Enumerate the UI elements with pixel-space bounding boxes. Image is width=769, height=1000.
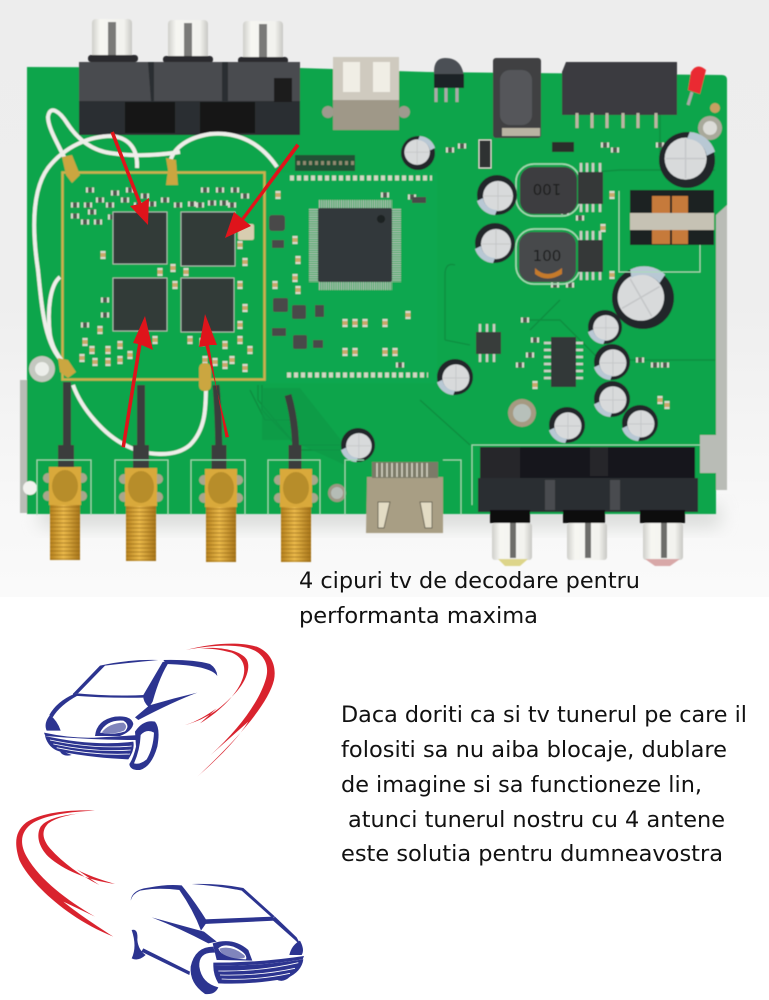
arrow: bottom-right chip <box>199 314 229 438</box>
small sub-board parts <box>269 197 426 349</box>
icon: upper fast car <box>44 644 275 777</box>
gold u.fl connectors <box>58 155 211 391</box>
logic chips <box>476 140 583 387</box>
USB port <box>322 57 410 130</box>
icon: lower fast car <box>16 810 304 994</box>
text block: tuner benefits: Daca doriti ca si tv tunerul pe care il <box>341 703 747 728</box>
connector pins row <box>295 155 355 171</box>
inductor value 100 <box>533 180 561 265</box>
mounting holes <box>23 103 722 502</box>
edge pad rows <box>287 178 432 375</box>
metal plate behind board <box>20 205 727 513</box>
electrolytic capacitors <box>341 132 715 462</box>
inductor value 100: 100 <box>533 247 561 265</box>
power jack <box>493 58 541 138</box>
HDMI port <box>366 462 443 533</box>
LED <box>688 66 706 105</box>
pin header <box>562 62 677 128</box>
common-mode choke <box>619 190 714 272</box>
power inductors <box>516 164 580 284</box>
tuner module <box>62 172 266 380</box>
caption: decoding chips: 4 cipuri tv de decodare pentru <box>299 569 640 594</box>
ground plane shading <box>262 388 345 465</box>
antenna cables <box>66 382 296 470</box>
arrow: top-right chip <box>225 144 300 238</box>
power ICs <box>578 163 603 280</box>
four tuner chips <box>113 212 235 332</box>
solder pads <box>71 142 670 409</box>
SMA antenna connectors <box>43 467 318 562</box>
sub-board <box>265 173 437 383</box>
text block: tuner benefits: folositi sa nu aiba blocaje, dublare <box>341 738 727 763</box>
inductor value 100: 100 <box>533 180 561 198</box>
crystal <box>238 224 254 240</box>
blue car body <box>131 884 304 994</box>
copper traces <box>250 110 715 450</box>
bottom RCA jacks <box>478 447 698 566</box>
RCA jacks top <box>79 19 300 135</box>
white silk boxes <box>37 445 700 515</box>
blue car body <box>44 660 217 770</box>
text block: tuner benefits: atunci tunerul nostru cu 4 antene <box>348 808 725 833</box>
arrow: top-left chip <box>110 131 149 225</box>
caption: decoding chips <box>299 569 640 629</box>
main processor <box>309 200 401 290</box>
red arrows pointing to chips <box>110 131 300 448</box>
grille lines <box>218 963 298 979</box>
red speed trails <box>185 644 275 777</box>
green PCB <box>27 67 727 514</box>
IR receiver <box>434 58 464 102</box>
caption: decoding chips: performanta maxima <box>299 604 538 629</box>
red speed trails <box>16 810 115 937</box>
text block: tuner benefits: de imagine si sa functioneze lin, <box>341 773 702 798</box>
grille lines <box>50 740 132 754</box>
text block: tuner benefits: este solutia pentru dumneavostra <box>341 842 723 867</box>
text block: tuner benefits <box>341 703 747 867</box>
white coax cables <box>34 110 277 454</box>
product photo: circuit board <box>0 0 769 597</box>
arrow: bottom-left chip <box>122 316 153 448</box>
